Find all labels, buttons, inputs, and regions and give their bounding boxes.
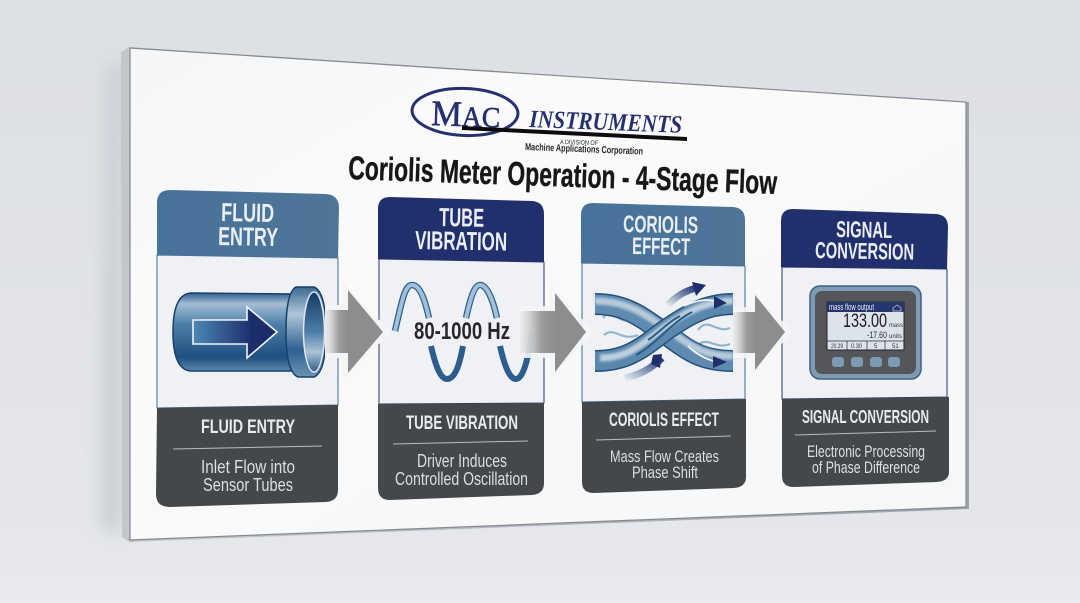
card footer	[782, 397, 949, 487]
heading: VIBRATION	[415, 225, 507, 257]
icon: meter display: 51	[892, 344, 899, 350]
arrow: stage 1 to 2	[325, 283, 391, 380]
panel: fluid entry	[156, 190, 339, 507]
footer description	[807, 442, 925, 477]
panel: signal conversion	[781, 209, 949, 487]
card footer	[156, 405, 338, 507]
icon: meter display: 20.29	[831, 344, 844, 350]
footer description: Electronic Processing	[807, 442, 925, 461]
heading: EFFECT	[632, 233, 691, 261]
chart: sine wave	[395, 285, 532, 379]
footer description: Inlet Flow into	[201, 457, 295, 477]
icon: meter display: units	[889, 333, 903, 340]
motion arrows	[684, 300, 722, 306]
icon: meter display	[810, 286, 921, 379]
heading: ENTRY	[218, 221, 278, 252]
card header	[157, 190, 339, 258]
footer title: SIGNAL CONVERSION	[802, 407, 929, 427]
heading	[415, 202, 507, 257]
footer description	[201, 457, 295, 495]
card body	[157, 255, 338, 408]
heading: TUBE	[439, 202, 484, 233]
card header	[781, 209, 948, 269]
logo letters MAC: MAC	[431, 93, 501, 135]
logo oval	[411, 87, 519, 137]
icon: meter display: 5	[874, 344, 878, 350]
card footer	[582, 399, 746, 493]
heading: CORIOLIS	[623, 211, 698, 239]
footer description: Controlled Oscillation	[395, 469, 528, 489]
arrow: stage 3 to 4	[733, 288, 793, 377]
icon: meter display: 133.00	[843, 311, 887, 332]
title: Coriolis Meter Operation - 4-Stage Flow	[348, 149, 778, 201]
heading: FLUID	[221, 197, 274, 228]
wave ripples left	[603, 314, 640, 337]
footer title: CORIOLIS EFFECT	[609, 410, 719, 431]
icon: meter display: -17.60	[867, 330, 887, 340]
icon: meter display: mass flow output	[829, 302, 874, 312]
footer description	[395, 451, 528, 489]
board shadow	[100, 60, 122, 538]
meter buttons	[832, 357, 844, 367]
icon: meter display: mass	[889, 323, 903, 329]
card header	[581, 203, 745, 266]
footer title: FLUID ENTRY	[201, 417, 295, 438]
icon: pipe with arrow	[173, 287, 326, 377]
heading	[623, 211, 698, 261]
wave ripples right	[698, 325, 730, 346]
panel: coriolis effect	[581, 203, 746, 493]
heading	[815, 216, 914, 265]
arrowheads	[651, 282, 727, 368]
footer title: TUBE VIBRATION	[406, 413, 518, 434]
footer description: Sensor Tubes	[203, 475, 293, 495]
footer description	[610, 447, 719, 482]
card body	[782, 267, 947, 399]
board panel	[130, 48, 966, 540]
card body	[379, 259, 544, 404]
footer description: of Phase Difference	[812, 458, 920, 477]
logo	[411, 87, 687, 158]
arrow: stage 2 to 3	[520, 285, 594, 380]
card footer	[378, 403, 544, 500]
meter screen	[827, 302, 904, 350]
panel: tube vibration	[378, 197, 544, 500]
icon: twisted tubes	[595, 288, 733, 378]
card header	[378, 197, 544, 262]
icon: meter display: 0.30	[851, 344, 863, 350]
frequency label: 80-1000 Hz	[414, 318, 510, 345]
card body	[582, 263, 745, 402]
board frame edge	[121, 47, 969, 542]
corporation name: Machine Applications Corporation	[525, 142, 643, 158]
logo word INSTRUMENTS: INSTRUMENTS	[528, 106, 683, 139]
heading: SIGNAL	[836, 216, 892, 243]
footer description: Phase Shift	[632, 463, 698, 482]
heading	[218, 197, 278, 252]
footer description: Driver Induces	[417, 451, 507, 471]
logo underline bar	[462, 126, 687, 141]
footer description: Mass Flow Creates	[610, 447, 719, 466]
heading: CONVERSION	[815, 237, 914, 265]
division line: A DIVISION OF	[560, 139, 598, 147]
